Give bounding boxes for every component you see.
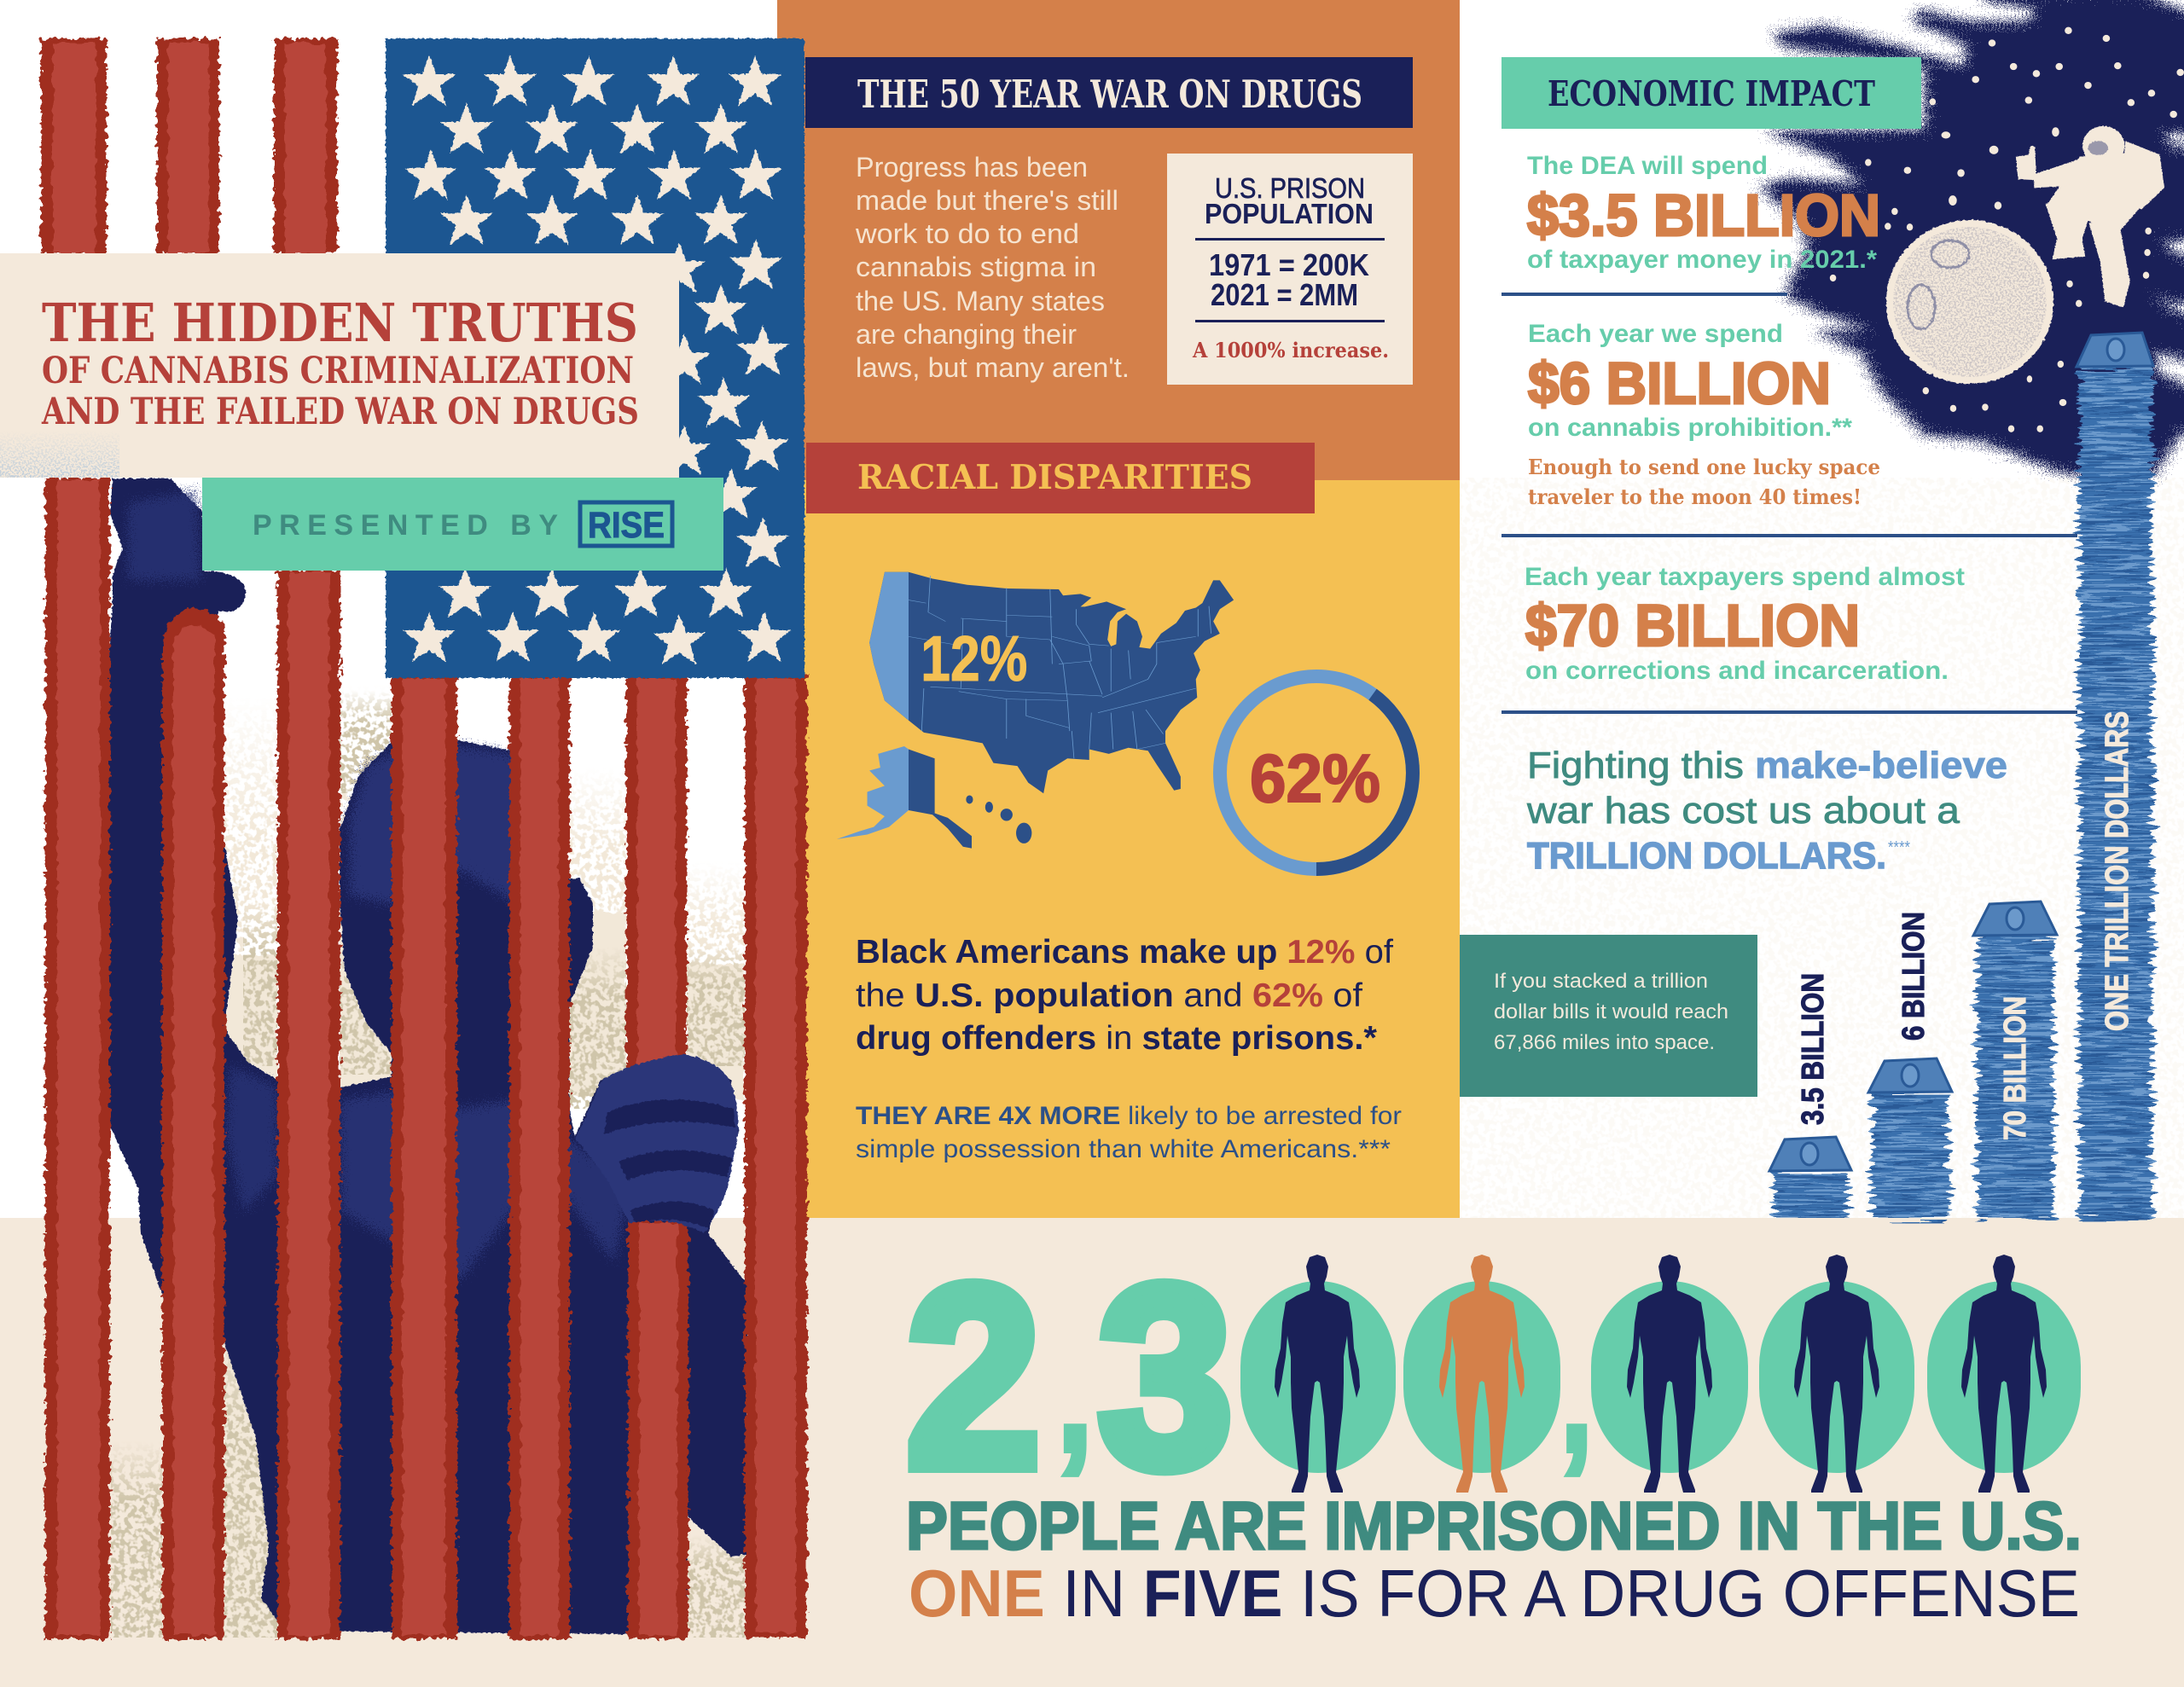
stack: 6 billion [1868, 1058, 1952, 1220]
Hawaii [966, 795, 1031, 844]
callout: stacked trillion dollar bills [1460, 935, 1757, 1097]
icon: astronaut [2016, 126, 2164, 307]
stat: 6 billion: $6 BILLION [1528, 351, 1831, 416]
war on drugs paragraph: the US. Many states [856, 286, 1105, 316]
stat: 70 billion: on corrections and incarceration. [1525, 657, 1949, 685]
war on drugs paragraph: Progress has been [856, 152, 1088, 183]
state borders [909, 576, 1211, 758]
card: U.S. prison population: POPULATION [1205, 198, 1374, 229]
solid zero shapes [1240, 1281, 2081, 1473]
stack labels: 70 BILLION [1997, 996, 2032, 1140]
stack labels: 3.5 BILLION [1795, 973, 1830, 1125]
stat: 70 billion [1525, 563, 1965, 685]
stat: 6 billion: Each year we spend [1528, 320, 1783, 348]
racial disparity statement: the U.S. population and 62% of [856, 977, 1362, 1014]
headline: people imprisoned: PEOPLE ARE IMPRISONED IN THE U.S. [906, 1487, 2082, 1563]
big number: 2,300,000 [906, 1232, 2081, 1522]
war on drugs paragraph: are changing their [856, 319, 1077, 350]
heading: the 50 year war on drugs: THE 50 YEAR WAR ON DRUGS [857, 72, 1362, 117]
racial disparity statement: drug offenders in state prisons.* [856, 1020, 1378, 1057]
title block [0, 253, 679, 478]
big number: 2,300,000: , [1561, 1312, 1592, 1483]
card: U.S. prison population: 1971 = 200K [1209, 247, 1369, 282]
panel: yellow racial disparities background [777, 480, 1460, 1218]
callout: stacked trillion dollar bills: If you stacked a trillion [1494, 970, 1708, 993]
moon trip note: Enough to send one lucky space [1528, 455, 1880, 479]
subtitle: OF CANNABIS CRIMINALIZATION [42, 350, 634, 392]
card: U.S. prison population: 2021 = 2MM [1211, 277, 1358, 312]
heading: racial disparities: RACIAL DISPARITIES [857, 458, 1252, 497]
stat: 3.5 billion [1527, 152, 1880, 274]
stack labels: ONE TRILLION DOLLARS [2100, 711, 2135, 1031]
trillion dollar statement: war has cost us about a [1526, 790, 1960, 832]
big number: 2,300,000: 2 [906, 1232, 1041, 1522]
continental US [869, 572, 1234, 793]
racial disparity statement: Black Americans make up 12% of [856, 934, 1393, 971]
stack labels: 6 BILLION [1896, 912, 1931, 1041]
moon trip note: traveler to the moon 40 times! [1528, 484, 1862, 509]
right hand gripping the bar [575, 1054, 738, 1233]
presented by banner: PRESENTED BY [253, 509, 558, 542]
donut chart: 62 percent [1220, 676, 1413, 869]
big number: 2,300,000: 0 [1606, 1245, 1734, 1511]
logo: RISE: RISE [588, 505, 665, 546]
illustration: prisoner behind flag bars [41, 38, 807, 1639]
stack: 70 billion [1973, 901, 2057, 1220]
stat: 3.5 billion: $3.5 BILLION [1527, 183, 1880, 248]
big number: 2,300,000: 3 [1098, 1232, 1233, 1522]
headline: one in five: ONE IN FIVE IS FOR A DRUG OFFENSE [909, 1556, 2080, 1631]
white streaks at the right of the sky [2139, 0, 2184, 396]
stat: 6 billion [1528, 320, 1852, 442]
stack: 3.5 billion [1769, 1137, 1851, 1220]
stat: 70 billion: $70 BILLION [1525, 593, 1860, 658]
lighter bar centres [53, 43, 796, 1635]
west coast highlight [869, 572, 909, 721]
dark bar edges [41, 38, 807, 1639]
big number: 2,300,000: 0 [1940, 1245, 2068, 1511]
presented by banner [202, 478, 723, 571]
stat: 6 billion: on cannabis prohibition.** [1528, 414, 1852, 442]
beige speckled background behind figure [111, 682, 745, 1638]
war on drugs paragraph: work to do to end [855, 218, 1079, 249]
big number: 2,300,000: 0 [1418, 1245, 1546, 1511]
flag bars [41, 38, 807, 1639]
heading: the 50 year war on drugs [805, 57, 1413, 128]
money stacks [1769, 333, 2153, 1220]
arrest statistic: THEY ARE 4X MORE likely to be arrested for [856, 1102, 1402, 1130]
callout: stacked trillion dollar bills: dollar bills it would reach [1494, 1000, 1728, 1023]
space illustration [1760, 0, 2184, 476]
donut chart: 62 percent: 62% [1250, 740, 1380, 816]
moon [1886, 220, 2053, 384]
moon trip note [1528, 455, 1880, 509]
big number: 2,300,000: 0 [1254, 1245, 1382, 1511]
callout: stacked trillion dollar bills: 67,866 miles into space. [1494, 1031, 1715, 1054]
panel: economic impact [1460, 57, 2077, 1097]
war on drugs paragraph: cannabis stigma in [856, 252, 1096, 282]
trillion dollar statement: Fighting this make-believe [1527, 745, 2007, 786]
trillion dollar statement: **** [1888, 838, 1910, 857]
stat: 3.5 billion: of taxpayer money in 2021.* [1527, 246, 1877, 274]
Alaska [909, 750, 972, 849]
heading: economic impact: ECONOMIC IMPACT [1548, 73, 1875, 114]
title: THE HIDDEN TRUTHS [42, 292, 638, 354]
big number: 2,300,000: 0 [1773, 1245, 1901, 1511]
stat: 3.5 billion: The DEA will spend [1527, 152, 1768, 180]
trillion dollar statement: TRILLION DOLLARS. [1527, 835, 1886, 877]
stack labels [1795, 711, 2135, 1140]
trillion dollar statement [1526, 745, 2007, 877]
faint paper texture on the economic column [1460, 478, 2184, 1218]
arrest statistic [856, 1102, 1402, 1163]
map of the United States [837, 572, 1234, 849]
figure silhouette [107, 478, 747, 1634]
stack: one trillion [2077, 333, 2153, 1220]
war on drugs paragraph: laws, but many aren't. [856, 352, 1130, 383]
subtitle [41, 350, 639, 433]
war on drugs paragraph [855, 152, 1130, 383]
heading: economic impact [1502, 57, 1921, 129]
flag canton with stars [386, 38, 804, 678]
war on drugs paragraph: made but there's still [856, 185, 1118, 216]
sky stars [1830, 27, 2184, 432]
bottom beige band [0, 1218, 2184, 1687]
panel: orange war on drugs background [777, 0, 1460, 480]
card: U.S. prison population: A 1000% increase. [1192, 338, 1389, 362]
arrest statistic: simple possession than white Americans.*** [856, 1135, 1391, 1163]
stat: 70 billion: Each year taxpayers spend almost [1525, 563, 1965, 591]
label: 12 percent: 12% [921, 623, 1027, 694]
racial disparity statement [856, 934, 1393, 1057]
subtitle: AND THE FAILED WAR ON DRUGS [41, 391, 639, 433]
card: U.S. prison population [1167, 154, 1413, 385]
card: U.S. prison population: U.S. PRISON [1215, 172, 1365, 204]
people silhouettes: one in five [1275, 1255, 2047, 1493]
night sky blob [1760, 0, 2184, 476]
big number: 2,300,000: , [1058, 1312, 1092, 1483]
heading: racial disparities [806, 443, 1315, 513]
